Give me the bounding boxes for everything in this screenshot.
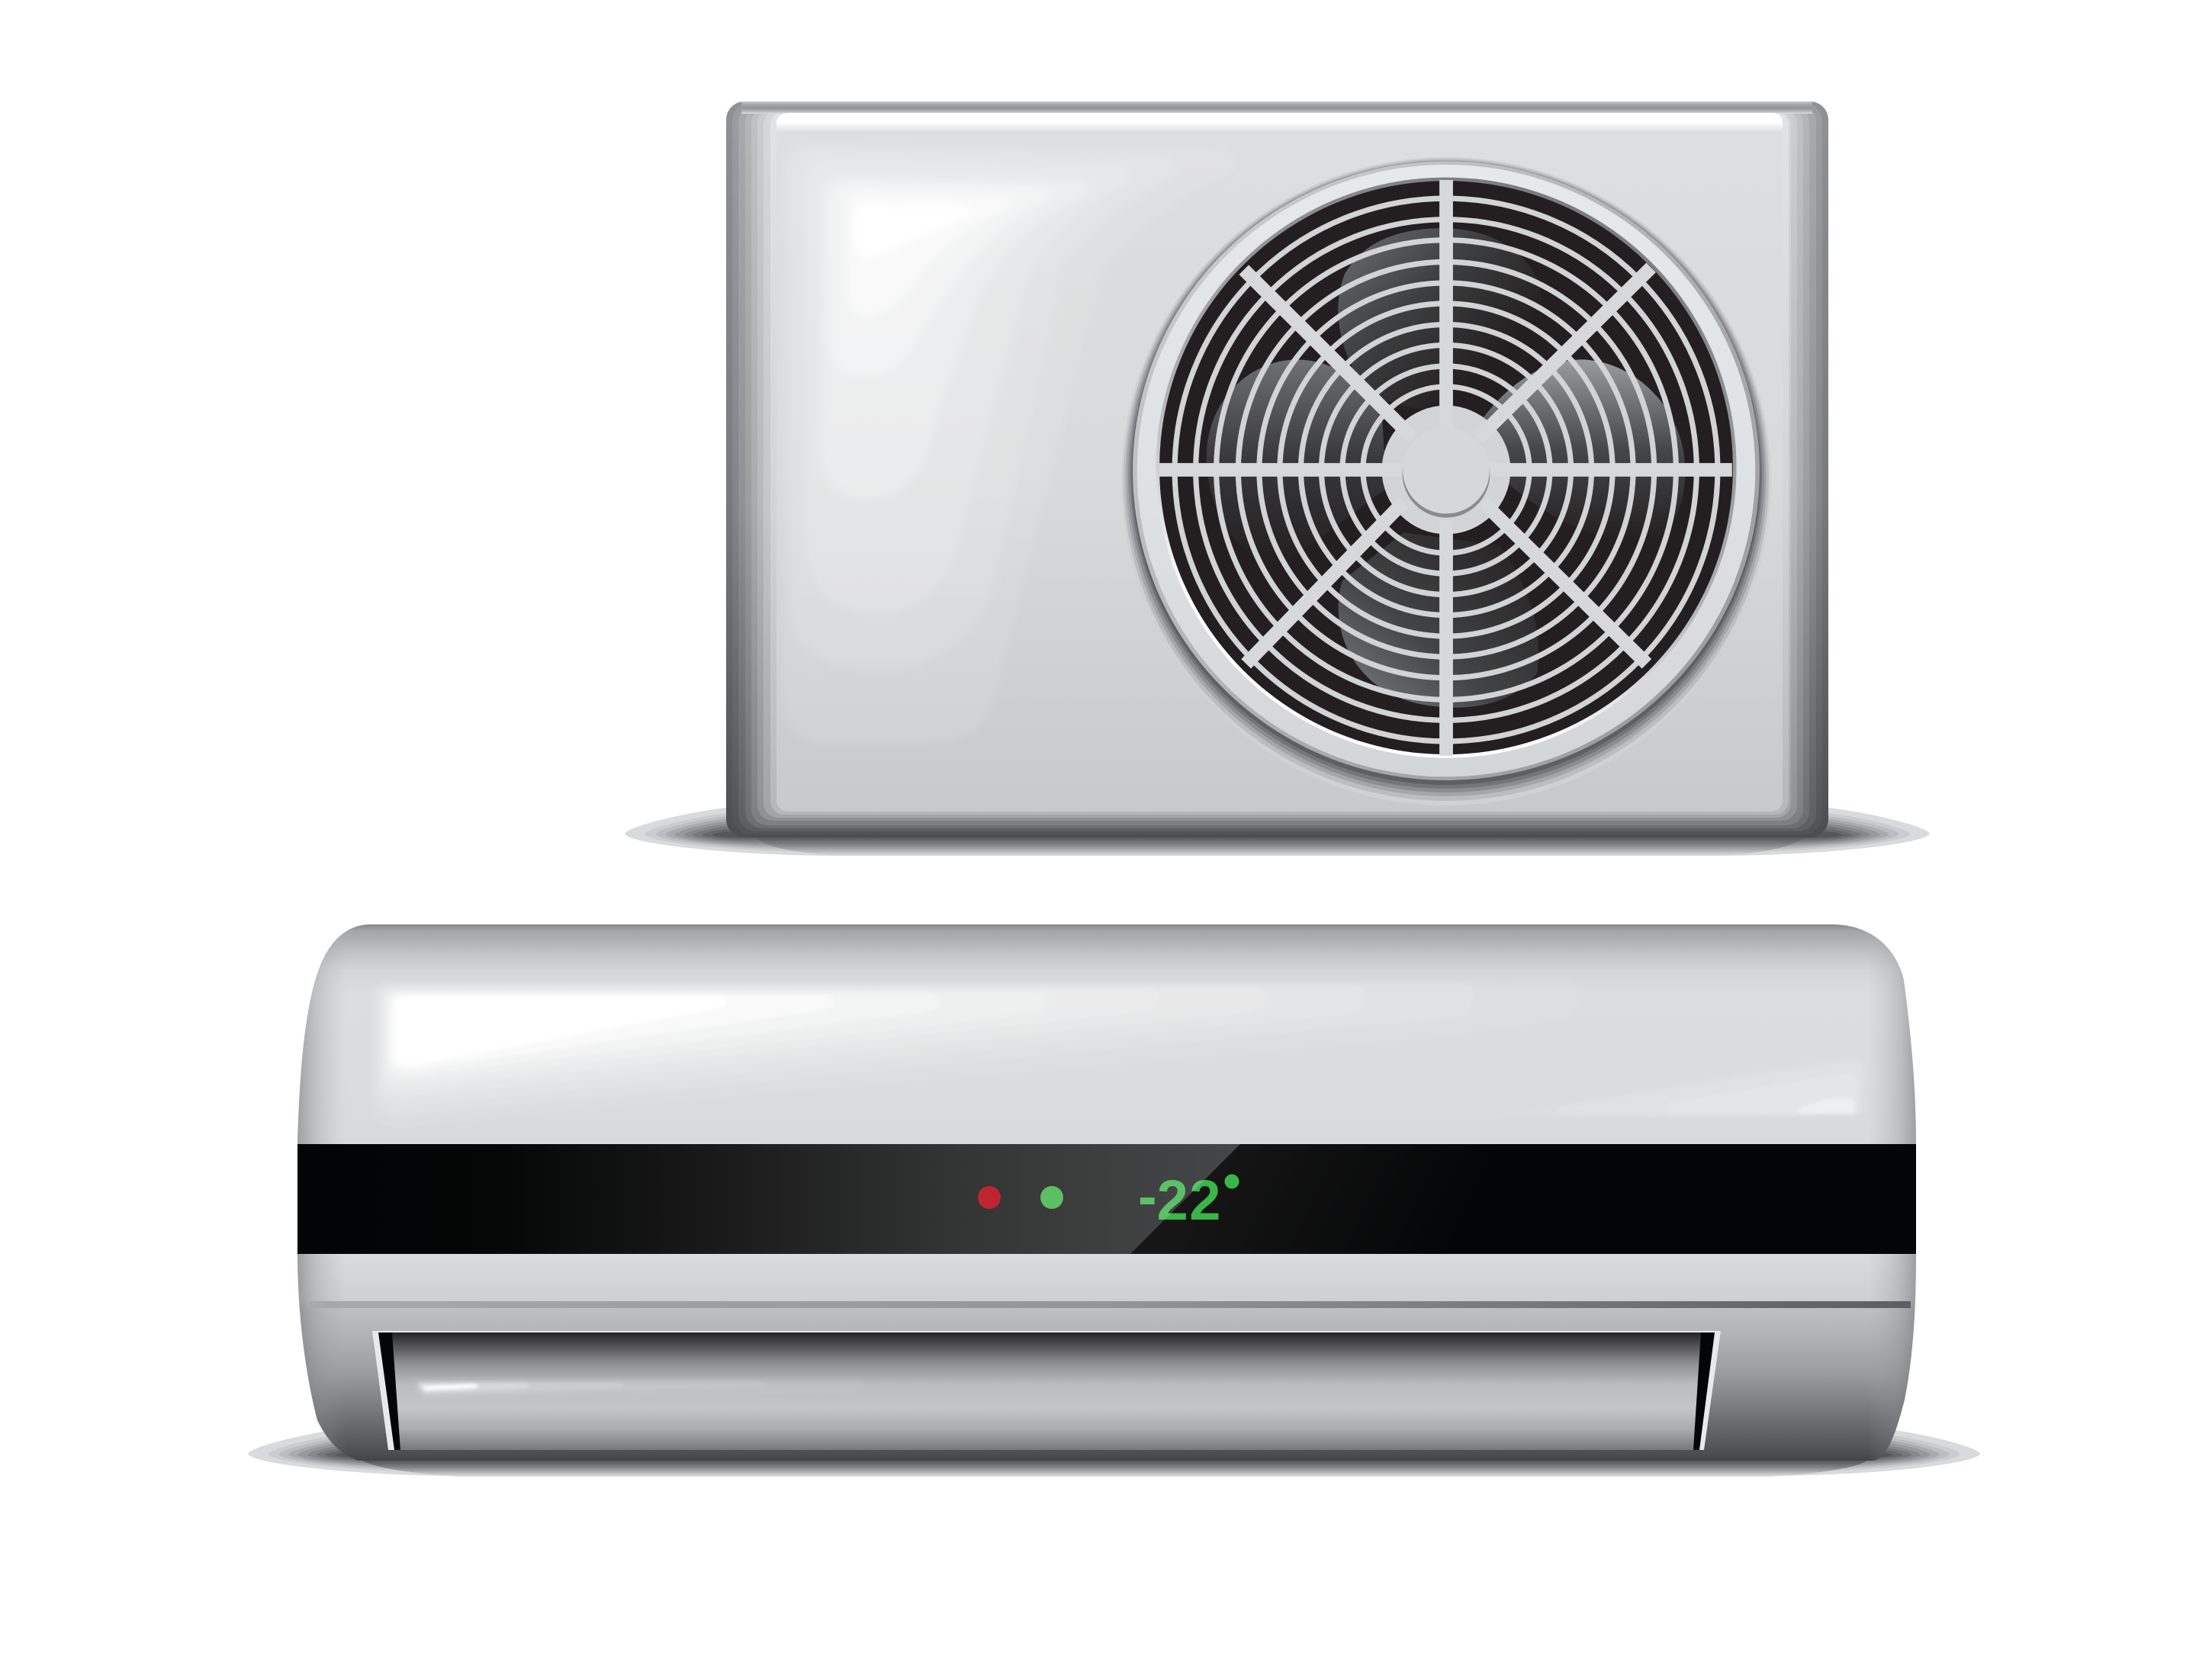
temperature readout: - (1138, 1165, 1157, 1228)
fan blade: bottom (1339, 532, 1538, 708)
fan guard spokes (1159, 180, 1732, 756)
indoor unit floor shadow (248, 1430, 1980, 1477)
indoor unit upper gloss highlight (371, 979, 1579, 1126)
outdoor unit floor shadow (625, 808, 1930, 856)
indoor unit (248, 924, 1980, 1477)
fan grille disc with blades (1156, 178, 1737, 758)
casing glossy highlight (782, 141, 1238, 744)
casing top gloss strip (776, 113, 1783, 132)
degree dot (1225, 1175, 1239, 1188)
fan hub base (1382, 406, 1510, 534)
status light: red (978, 1186, 1001, 1209)
fan guard concentric rings (1175, 198, 1718, 741)
status light: green (1040, 1186, 1063, 1209)
indoor unit body (290, 919, 1922, 1464)
fan blade: left (1207, 360, 1385, 531)
outdoor unit (625, 101, 1930, 856)
fan blade: top (1338, 228, 1543, 419)
vent seam line (307, 1301, 1911, 1308)
fan outer ring (1133, 161, 1760, 780)
indoor unit lower right gloss highlight (1487, 1056, 1865, 1118)
black display band (290, 1144, 1922, 1254)
fan assembly (1121, 157, 1771, 805)
casing top edge (741, 101, 1812, 114)
fan drop shadow (1121, 157, 1771, 805)
fan hub cap (1403, 427, 1490, 518)
temperature readout: 22 (1157, 1168, 1222, 1232)
air outlet louver (372, 1331, 1721, 1450)
outdoor unit casing with stepped bevel (726, 101, 1828, 837)
louver gloss highlight (416, 1378, 863, 1399)
fan blade: right (1483, 359, 1685, 523)
